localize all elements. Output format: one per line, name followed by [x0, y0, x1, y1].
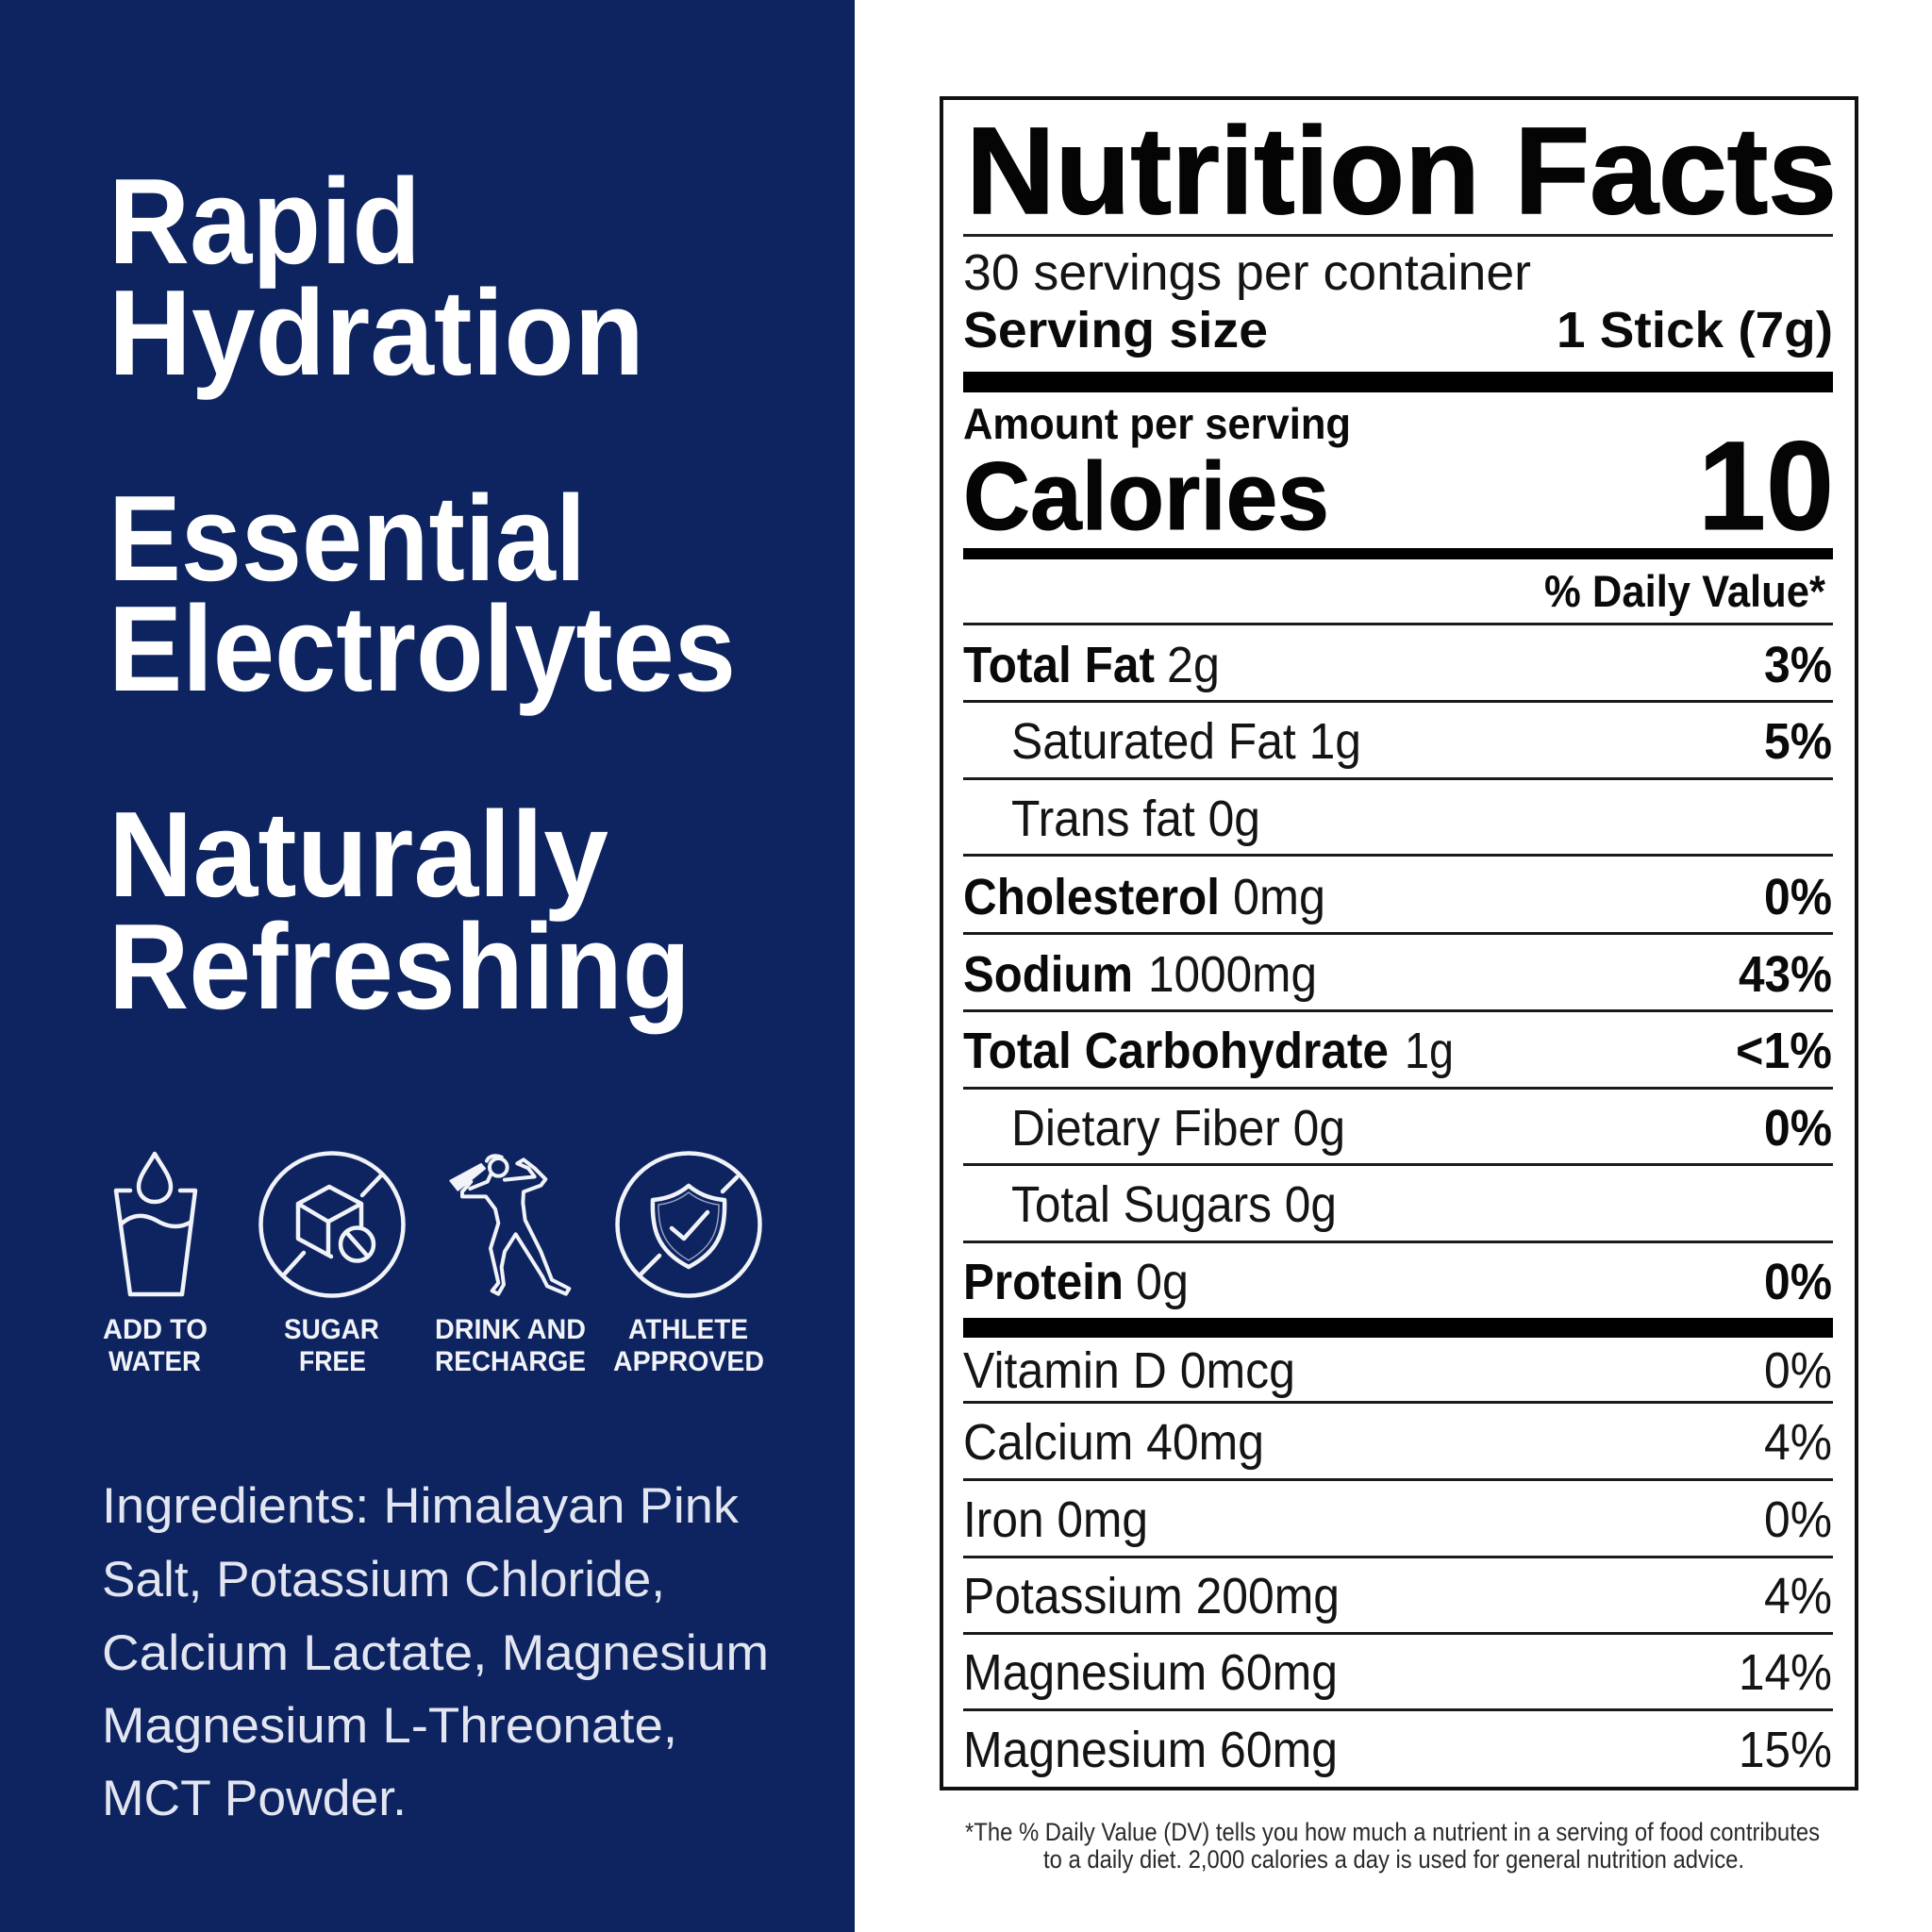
- row: total fat: [963, 637, 1832, 693]
- row: saturated fat: Saturated Fat 1g: [1011, 713, 1361, 770]
- heading: rapid hydration: Rapid: [108, 154, 421, 290]
- footnote: [965, 1818, 1820, 1874]
- row: cholesterol: 0%: [1764, 869, 1832, 925]
- row: magnesium 15%: [963, 1722, 1832, 1778]
- icon: sugar free cube: [260, 1153, 404, 1296]
- heading: naturally refreshing: [108, 787, 691, 1035]
- row: protein: 0%: [1764, 1254, 1832, 1310]
- row: total carbohydrate: <1%: [1736, 1023, 1832, 1079]
- row: cholesterol: [963, 869, 1832, 925]
- row: total carbohydrate: 1g: [1405, 1023, 1454, 1079]
- title: nutrition facts: Nutrition Facts: [966, 101, 1837, 240]
- row: protein: Protein: [963, 1254, 1124, 1310]
- icon: athlete approved shield: [617, 1153, 760, 1296]
- label: sugar free: FREE: [299, 1346, 366, 1377]
- row: potassium: [963, 1568, 1832, 1624]
- row: magnesium 15%: Magnesium 60mg: [963, 1722, 1338, 1778]
- row: dietary fiber: 0%: [1764, 1100, 1832, 1157]
- row: magnesium 15%: 15%: [1739, 1722, 1832, 1778]
- row: sodium: 1000mg: [1148, 946, 1317, 1003]
- panel: benefits (navy): [0, 0, 855, 1932]
- row: vitamin d: Vitamin D 0mcg: [963, 1342, 1295, 1399]
- daily value heading: % Daily Value*: [1544, 566, 1826, 616]
- label: sugar free: SUGAR: [284, 1314, 379, 1345]
- heading: essential electrolytes: Essential: [108, 471, 586, 607]
- label: sugar free: [284, 1314, 379, 1377]
- row: saturated fat: 5%: [1764, 713, 1832, 770]
- heading: rapid hydration: Hydration: [108, 265, 644, 401]
- icon: glass of water with drop: [116, 1154, 195, 1294]
- row: dietary fiber: Dietary Fiber 0g: [1011, 1100, 1345, 1157]
- heading: rapid hydration: [108, 154, 644, 401]
- ingredients text: MCT Powder.: [102, 1771, 407, 1826]
- label: athlete approved: [613, 1314, 764, 1377]
- row: iron: 0%: [1764, 1491, 1832, 1548]
- servings information: [963, 244, 1833, 358]
- row: total fat: Total Fat: [963, 637, 1155, 693]
- ingredients text: Salt, Potassium Chloride,: [102, 1552, 665, 1607]
- row: total sugars: Total Sugars 0g: [1011, 1176, 1337, 1233]
- label: add to water: WATER: [108, 1346, 201, 1377]
- label: drink and recharge: [435, 1314, 586, 1377]
- row: potassium: Potassium 200mg: [963, 1568, 1340, 1624]
- icon: athlete drinking and flexing: [450, 1156, 569, 1294]
- servings information: 30 servings per container: [963, 244, 1531, 301]
- row: iron: Iron 0mg: [963, 1491, 1148, 1548]
- row: dietary fiber: [1011, 1100, 1832, 1157]
- row: vitamin d: [963, 1342, 1832, 1399]
- ingredients text: Calcium Lactate, Magnesium: [102, 1625, 769, 1681]
- label: athlete approved: ATHLETE: [628, 1314, 748, 1345]
- row: potassium: 4%: [1764, 1568, 1832, 1624]
- row: protein: [963, 1254, 1832, 1310]
- calories block: 10: [1698, 416, 1834, 557]
- row: magnesium 14%: Magnesium 60mg: [963, 1644, 1338, 1701]
- row: total fat: 2g: [1167, 637, 1220, 693]
- row: magnesium 14%: [963, 1644, 1832, 1701]
- ingredients text: Ingredients: Himalayan Pink: [102, 1478, 740, 1534]
- heading: naturally refreshing: Naturally: [108, 787, 608, 923]
- row: magnesium 14%: 14%: [1739, 1644, 1832, 1701]
- label: add to water: [103, 1314, 208, 1377]
- label: athlete approved: APPROVED: [613, 1346, 764, 1377]
- row: protein: 0g: [1136, 1254, 1189, 1310]
- row: calcium: [963, 1414, 1832, 1471]
- divider rules: [963, 623, 1833, 1711]
- row: trans fat: Trans fat 0g: [1011, 791, 1260, 847]
- ingredients text: [102, 1478, 769, 1826]
- servings information: 1 Stick (7g): [1557, 302, 1833, 358]
- row: sodium: 43%: [1739, 946, 1832, 1003]
- row: calcium: 4%: [1764, 1414, 1832, 1471]
- row: total carbohydrate: [963, 1023, 1832, 1079]
- footnote: *The % Daily Value (DV) tells you how much a nutrient in a serving of food contributes: [965, 1818, 1820, 1846]
- footnote: to a daily diet. 2,000 calories a day is used for general nutrition advice.: [1043, 1845, 1744, 1874]
- row: calcium: Calcium 40mg: [963, 1414, 1264, 1471]
- row: saturated fat: [1011, 713, 1832, 770]
- label: drink and recharge: RECHARGE: [435, 1346, 586, 1377]
- calories block: Calories: [963, 442, 1329, 550]
- row: cholesterol: 0mg: [1233, 869, 1325, 925]
- calories block: [963, 399, 1834, 557]
- row: cholesterol: Cholesterol: [963, 869, 1220, 925]
- row: vitamin d: 0%: [1764, 1342, 1832, 1399]
- macronutrient rows: [963, 637, 1832, 1310]
- row: sodium: [963, 946, 1832, 1003]
- label: drink and recharge: DRINK AND: [435, 1314, 586, 1345]
- panel: nutrition facts label: [941, 98, 1857, 1789]
- row: total carbohydrate: Total Carbohydrate: [963, 1023, 1389, 1079]
- row: total fat: 3%: [1764, 637, 1832, 693]
- calories block: Amount per serving: [963, 399, 1351, 448]
- row: iron: [963, 1491, 1832, 1548]
- heading: essential electrolytes: Electrolytes: [108, 581, 736, 717]
- heading: naturally refreshing: Refreshing: [108, 899, 691, 1035]
- servings information: Serving size: [963, 302, 1268, 358]
- vitamin and mineral rows: [963, 1342, 1832, 1778]
- heading: essential electrolytes: [108, 471, 736, 717]
- row: sodium: Sodium: [963, 946, 1133, 1003]
- ingredients text: Magnesium L-Threonate,: [102, 1698, 677, 1754]
- label: add to water: ADD TO: [103, 1314, 208, 1345]
